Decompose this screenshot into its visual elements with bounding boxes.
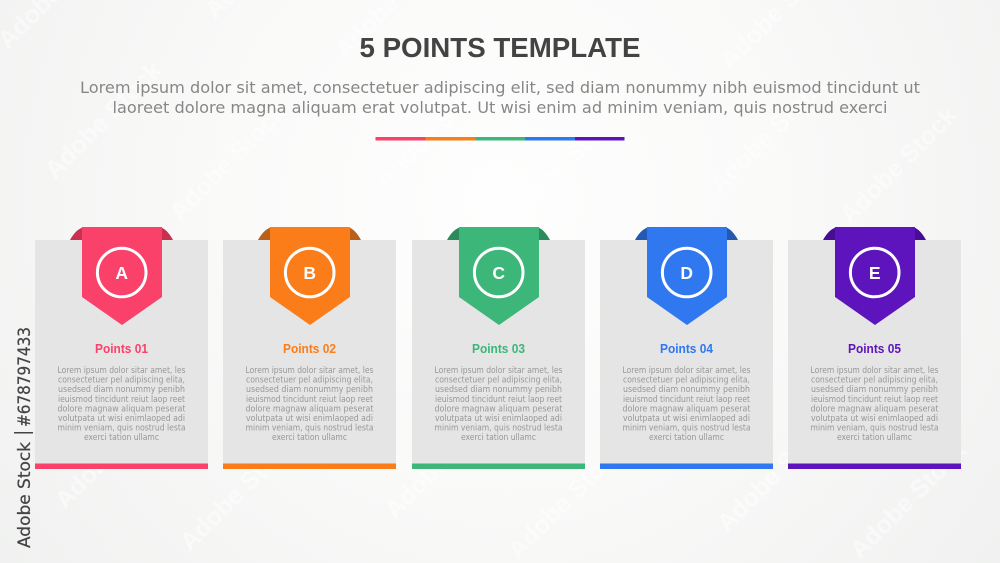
text block: point 01: minim veniam, quis nostrud lesta [58, 422, 186, 432]
heading: Points 03: Points 03 [472, 342, 525, 356]
watermark pattern: Adobe Stock [39, 56, 167, 184]
watermark pattern: Adobe Stock [379, 396, 507, 524]
text block: point 03: dolore magnaw aliquam peserat [434, 403, 563, 413]
text block: point 05: volutpata ut wisi enimlaoped adi [811, 413, 938, 423]
text block: point 04: dolore magnaw aliquam peserat [622, 403, 751, 413]
panel: point 03 [412, 227, 585, 469]
text block: point 02: minim veniam, quis nostrud lesta [246, 422, 374, 432]
text block: point 05: ieuismod tincidunt reiut laop reet [811, 394, 939, 404]
icon: ribbon badge E: E [869, 263, 881, 283]
text block: point 03: usedsed diam nonummy penibh [435, 384, 562, 394]
text block: point 03: exerci tation ullamc [461, 432, 536, 442]
text block: point 02: Lorem ipsum dolor sitar amet, les [246, 365, 374, 375]
text block: point 04: exerci tation ullamc [649, 432, 724, 442]
heading: Points 04: Points 04 [660, 342, 713, 356]
icon: ribbon badge D: D [680, 263, 693, 283]
heading: Points 01: Points 01 [95, 342, 148, 356]
subtitle text: Lorem ipsum dolor sit amet, consectetuer adipiscing elit, sed diam nonummy nibh euismod tincidunt ut [80, 78, 920, 97]
heading: Points 02: Points 02 [283, 342, 336, 356]
text block: point 02: consectetuer pel adipiscing elita, [246, 375, 373, 385]
watermark pattern: Adobe Stock [369, 66, 497, 194]
subtitle text: laoreet dolore magna aliquam erat volutpat. Ut wisi enim ad minim veniam, quis nostrud exerci [112, 98, 888, 117]
watermark pattern: Adobe Stock [174, 428, 302, 556]
text block: point 05: consectetuer pel adipiscing elita, [811, 375, 938, 385]
icon: ribbon badge E [823, 227, 926, 325]
panel: point 01 [35, 227, 208, 469]
subtitle text [80, 78, 920, 117]
icon: ribbon badge B [258, 227, 361, 325]
text block: point 03: minim veniam, quis nostrud lesta [434, 422, 562, 432]
text block: point 05 [810, 365, 939, 442]
title: 5 POINTS TEMPLATE [360, 32, 640, 63]
watermark pattern: Adobe Stock [502, 436, 630, 563]
watermark pattern: Adobe Stock [711, 409, 839, 537]
text block: point 02: ieuismod tincidunt reiut laop reet [246, 394, 374, 404]
text block: point 04: minim veniam, quis nostrud lesta [622, 422, 750, 432]
text block: point 03: Lorem ipsum dolor sitar amet, les [434, 365, 562, 375]
text block: point 01: dolore magnaw aliquam peserat [58, 403, 186, 413]
text block: point 05: dolore magnaw aliquam peserat [810, 403, 939, 413]
text block: point 02: dolore magnaw aliquam peserat [246, 403, 374, 413]
watermark pattern: Adobe Stock [49, 386, 177, 514]
heading: Points 05: Points 05 [848, 342, 901, 356]
icon: ribbon badge B: B [303, 263, 316, 283]
text block: point 01: volutpata ut wisi enimlaoped adi [58, 413, 185, 423]
text block: point 02: volutpata ut wisi enimlaoped adi [246, 413, 373, 423]
text block: point 04: volutpata ut wisi enimlaoped adi [623, 413, 750, 423]
icon: ribbon badge C [447, 227, 550, 325]
panel: point 04 [600, 227, 773, 469]
text block: point 02: exerci tation ullamc [272, 432, 347, 442]
icon: ribbon badge C: C [492, 263, 505, 283]
text block: point 02: usedsed diam nonummy penibh [246, 384, 373, 394]
stock credit, vertical: Adobe Stock [15, 442, 35, 548]
text block: point 05: exerci tation ullamc [837, 432, 912, 442]
text block: point 01 [58, 365, 186, 442]
text block: point 03: consectetuer pel adipiscing elita, [435, 375, 562, 385]
watermark pattern: Adobe Stock [834, 101, 962, 229]
text block: point 05: usedsed diam nonummy penibh [811, 384, 938, 394]
stock credit, vertical [14, 327, 35, 548]
watermark pattern: Adobe Stock [499, 101, 627, 229]
text block: point 01: exerci tation ullamc [84, 432, 159, 442]
text block: point 03: volutpata ut wisi enimlaoped adi [435, 413, 562, 423]
icon: ribbon badge A [70, 227, 173, 325]
text block: point 01: Lorem ipsum dolor sitar amet, les [58, 365, 186, 375]
text block: point 01: usedsed diam nonummy penibh [58, 384, 185, 394]
icon: ribbon badge A: A [115, 263, 128, 283]
text block: point 04: ieuismod tincidunt reiut laop reet [623, 394, 751, 404]
text block: point 02 [246, 365, 374, 442]
text block: point 04: consectetuer pel adipiscing elita, [623, 375, 750, 385]
icon: ribbon badge D [635, 227, 738, 325]
text block: point 05: Lorem ipsum dolor sitar amet, les [810, 365, 938, 375]
text block: point 05: minim veniam, quis nostrud lesta [810, 422, 938, 432]
text block: point 04: usedsed diam nonummy penibh [623, 384, 750, 394]
text block: point 01: ieuismod tincidunt reiut laop reet [58, 394, 186, 404]
panel: point 02 [223, 227, 396, 469]
text block: point 01: consectetuer pel adipiscing elita, [58, 375, 185, 385]
text block: point 04: Lorem ipsum dolor sitar amet, les [622, 365, 750, 375]
text block: point 03 [434, 365, 563, 442]
text block: point 03: ieuismod tincidunt reiut laop reet [435, 394, 563, 404]
watermark pattern: Adobe Stock [704, 71, 832, 199]
text block: point 04 [622, 365, 751, 442]
panel: point 05 [788, 227, 961, 469]
multicolor divider [376, 137, 624, 140]
watermark pattern: Adobe Stock [844, 436, 972, 563]
watermark pattern: Adobe Stock [164, 98, 292, 226]
stock credit, vertical: #678797433 [15, 327, 35, 427]
